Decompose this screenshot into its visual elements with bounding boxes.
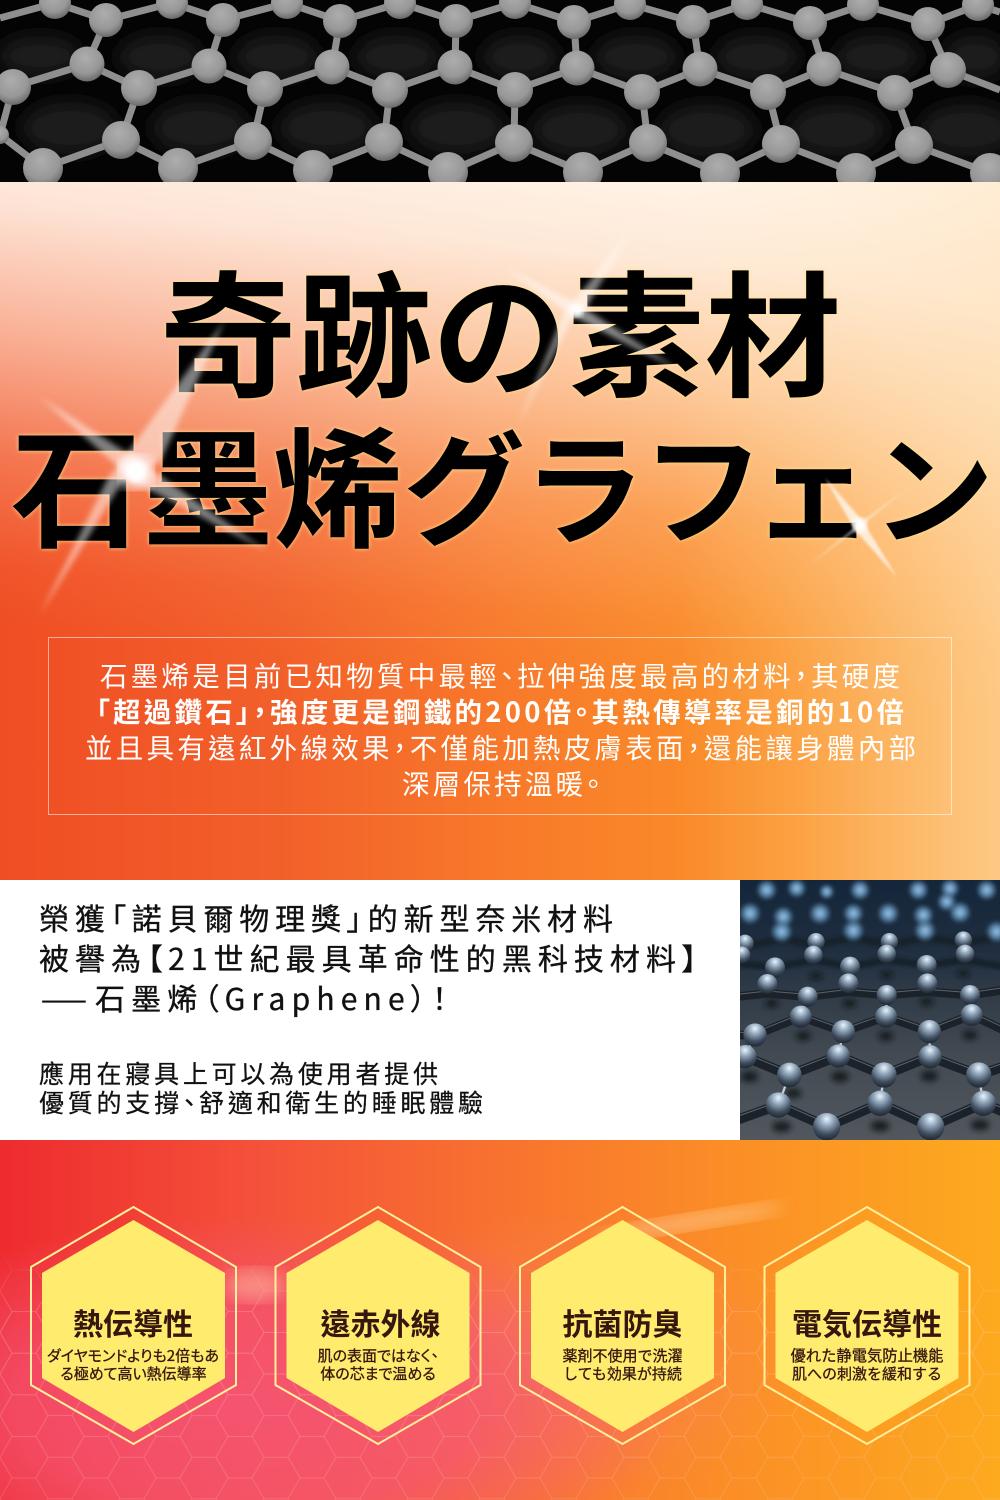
- description box: 「超過鑽石」，強度更是鋼鐵的200倍。其熱傳導率是銅的10倍: [96, 690, 904, 730]
- heading text: 被譽為【21世紀最具革命性的黑科技材料】: [39, 935, 697, 979]
- title: [11, 229, 994, 575]
- hexagon: far infrared: 体の芯まで温める: [320, 1363, 436, 1384]
- hexagon: antibacterial deodorant: しても効果が持続: [563, 1363, 682, 1384]
- hexagon: antibacterial deodorant: 抗菌防臭: [562, 1300, 682, 1344]
- hexagon: far infrared: [276, 1207, 480, 1444]
- heading text: 榮獲「諾貝爾物理獎」的新型奈米材料: [39, 895, 613, 939]
- icon: sparkle left: [40, 320, 268, 615]
- heading text: 石墨烯（Graphene）！: [95, 975, 447, 1019]
- hexagon: electrical conductivity: 肌への刺激を緩和する: [792, 1363, 942, 1384]
- panel: hero gradient with title and description: [0, 182, 1000, 880]
- title: 石墨烯: [11, 387, 403, 575]
- heading text: [39, 895, 697, 1019]
- description box: 深層保持溫暖。: [402, 762, 600, 802]
- hexagon: thermal conductivity: [31, 1207, 236, 1444]
- hexagon: thermal conductivity: る極めて高い熱伝導率: [60, 1363, 207, 1384]
- hexagon: far infrared: 肌の表面ではなく、: [318, 1345, 438, 1366]
- body text: 應用在寢具上可以為使用者提供: [39, 1055, 438, 1091]
- hexagon: electrical conductivity: [764, 1207, 970, 1444]
- hexagon: far infrared: 遠赤外線: [320, 1300, 440, 1344]
- hexagon: antibacterial deodorant: [520, 1207, 725, 1444]
- hexagon: antibacterial deodorant: 薬剤不使用で洗濯: [562, 1345, 683, 1366]
- description box: 石墨烯是目前已知物質中最輕、拉伸強度最高的材料，其硬度: [100, 654, 900, 694]
- description box: 並且具有遠紅外線效果，不僅能加熱皮膚表面，還能讓身體內部: [85, 726, 916, 766]
- hexagon: electrical conductivity: 優れた静電気防止機能: [791, 1344, 943, 1366]
- title: 奇跡の素材: [160, 229, 841, 426]
- title: グラフェン: [403, 394, 994, 571]
- panel: feature band: [0, 1140, 1000, 1500]
- icon: sparkle right: [808, 478, 905, 577]
- banner: graphene lattice dark photo: [0, 0, 1000, 182]
- body text: [39, 1055, 483, 1120]
- hexagon: thermal conductivity: ダイヤモンドよりも2倍もあ: [47, 1345, 219, 1366]
- icon: sparkle centre: [505, 232, 682, 425]
- hexagon: thermal conductivity: 熱伝導性: [73, 1300, 193, 1344]
- description box: [48, 638, 952, 814]
- image: blue graphene lattice: [740, 880, 1000, 1140]
- body text: 優質的支撐、舒適和衛生的睡眠體驗: [39, 1084, 483, 1120]
- hexagon: electrical conductivity: 電気伝導性: [792, 1300, 942, 1344]
- heading text: —: [40, 975, 88, 1019]
- panel: white intro: [0, 880, 740, 1140]
